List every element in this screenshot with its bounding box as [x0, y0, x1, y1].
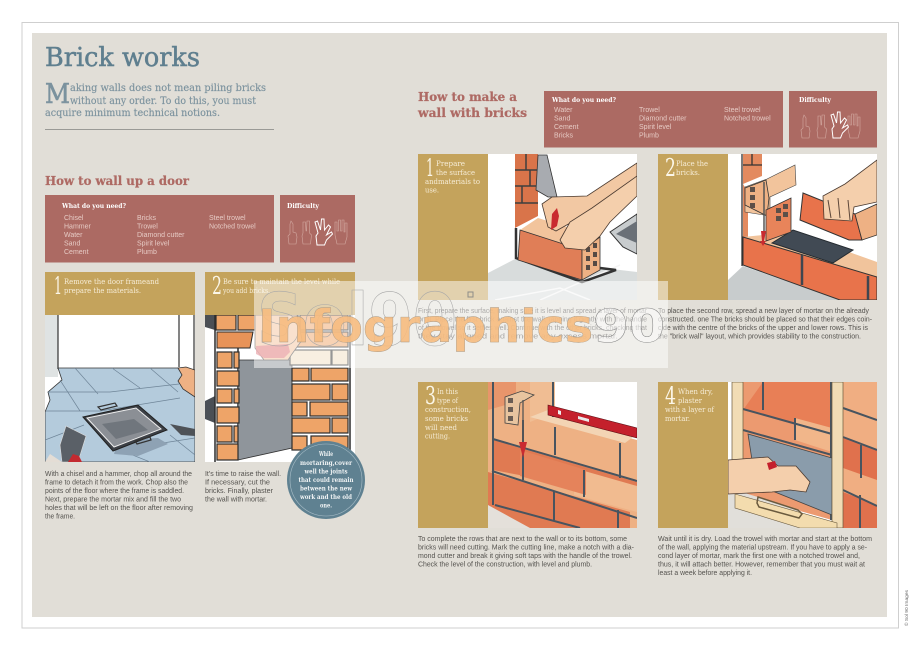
panel: what do you need (wall): What do you need? — [551, 96, 616, 104]
intro text: without any order. To do this, you must — [70, 95, 257, 107]
panel: what do you need (door): Water — [64, 232, 83, 239]
body text: step 1 (wall): on it. Place the first brick against the wall, tapping it gently with the handle — [418, 316, 647, 324]
body text: step 4 (wall): of the wall, applying the material upstream. If you have to apply a se- — [658, 544, 868, 552]
illustration: bricks and mortar in doorway — [205, 315, 355, 462]
step 2 header (wall): 2 — [665, 154, 676, 182]
step 2 header (door) — [205, 272, 355, 315]
body text: step 1 (door): frame to detach it from the work. Chop also the — [45, 480, 188, 486]
step 1 header (wall): Prepare — [436, 160, 465, 168]
panel: what do you need (door): Chisel — [64, 215, 84, 222]
panel: difficulty (door): Difficulty — [287, 202, 319, 210]
step 3 header (wall): 3 — [425, 382, 436, 410]
panel: what do you need (wall): Trowel — [639, 107, 660, 114]
body text: step 2 (wall): cide with the centre of the bricks of the upper and lower rows. This is — [658, 325, 868, 332]
step 3 header (wall): cutting. — [425, 432, 450, 440]
step 1 header (wall): the surface — [436, 169, 475, 177]
body text: step 3 (wall): Check the level of the construction, with level and plumb. — [418, 562, 592, 568]
heading: how to make a wall with bricks — [417, 89, 527, 120]
step 1 header (wall) — [418, 154, 488, 300]
callout: mortaring tip — [287, 441, 365, 519]
panel: difficulty (wall) — [789, 91, 877, 148]
body text: step 4 (wall): cond layer of mortar, mark the first one with a notched trowel and, — [658, 553, 860, 560]
step 2 header (wall): Place the — [676, 160, 708, 168]
intro text: M — [45, 79, 70, 110]
step 2 header (door): you add bricks. — [222, 287, 270, 295]
step 3 header (wall): some bricks — [425, 415, 468, 423]
step 1 header (door): Remove the door frameand — [64, 278, 160, 286]
heading: how to make a wall with bricks: wall with bricks — [417, 105, 527, 120]
body text: step 2 (door): If necessary, cut the — [205, 480, 270, 486]
step 1 header (wall): andmaterials to — [425, 178, 480, 186]
body text: step 4 (wall): Wait until it is dry. Load the trowel with mortar and start at the bottom — [658, 536, 872, 543]
step 1 header (door) — [45, 272, 195, 315]
illustration: placing first brick with trowel — [488, 154, 637, 300]
body text: step 3 (wall): mond cutter and break it giving soft taps with the handle of the trowel. — [418, 553, 632, 560]
step 4 header (wall): mortar. — [665, 415, 690, 423]
intro text: aking walls does not mean piling bricks — [70, 82, 266, 94]
body text: step 1 (wall): of the trowel so it settles well. Continue with the other bricks, checking that — [418, 325, 647, 332]
panel: what do you need (door): Plumb — [137, 249, 157, 256]
callout: mortaring tip: that could remain — [298, 477, 354, 484]
body text: step 2 (wall): To place the second row, spread a new layer of mortar on the already — [658, 308, 869, 315]
panel: what do you need (door): Trowel — [137, 224, 158, 230]
body text: step 1 (door): Next, prepare the mortar mix and fill the two — [45, 496, 181, 504]
illustration: cutting bricks with spirit level — [488, 382, 637, 528]
callout: mortaring tip: While — [318, 451, 333, 458]
illustration: tiled floor with mortar tray — [45, 315, 195, 462]
body text: step 2 (door): It's time to raise the wall. — [205, 471, 281, 478]
step 1 header (wall): use. — [425, 186, 439, 194]
callout: mortaring tip: work and the old — [299, 494, 353, 501]
callout: mortaring tip: mortaring,cover — [300, 460, 353, 467]
body text: step 1 (wall): they stay aligned and remove any excess mortar. — [418, 334, 618, 340]
body text: step 4 (wall): thus, it will attach better. However, remember that you must wait at — [658, 562, 865, 568]
illustration: laying second row of bricks — [728, 154, 877, 300]
panel: what do you need (wall): Notched trowel — [724, 116, 771, 122]
panel: what do you need (door): Sand — [64, 240, 80, 248]
body text: step 2 (door) — [205, 471, 281, 504]
panel: what do you need (door): Notched trowel — [209, 224, 256, 230]
body text: step 2 (wall) — [658, 308, 873, 340]
panel: what do you need (wall): Water — [554, 107, 573, 114]
step 3 header (wall): In this — [437, 388, 458, 396]
body text: step 3 (wall): To complete the rows that are next to the wall or to its bottom, some — [418, 536, 627, 543]
body text: step 1 (door): points of the floor where the frame is saddled. — [45, 488, 184, 495]
step 1 header (door): prepare the materials. — [64, 287, 141, 295]
heading: how to wall up a door: How to wall up a door — [45, 173, 189, 188]
panel: what do you need (wall): Bricks — [554, 132, 574, 140]
step 4 header (wall): 4 — [665, 382, 676, 410]
step 3 header (wall): will need — [425, 424, 458, 432]
step 2 header (wall): bricks. — [676, 169, 700, 177]
callout: mortaring tip: between the new — [300, 486, 353, 492]
body text: step 1 (wall): First, prepare the surface, making sure it is level and spread a layer of mortar — [418, 308, 648, 315]
heading: how to make a wall with bricks: How to make a — [418, 89, 517, 104]
watermark: Infographics — [258, 300, 593, 353]
panel: what do you need (wall) — [544, 91, 783, 148]
panel: what do you need (door): Spirit level — [137, 240, 170, 248]
body text: step 2 (door): the wall with mortar. — [205, 496, 267, 504]
body text: step 1 (door): the frame. — [45, 514, 75, 520]
title: Brick works — [45, 43, 200, 73]
step 2 header (door): Be sure to maintain the level while — [223, 278, 340, 286]
step 2 header (wall) — [658, 154, 728, 300]
panel: what do you need (door): Diamond cutter — [137, 232, 185, 239]
panel: what do you need (door): Cement — [64, 249, 89, 256]
panel: what do you need (door): Hammer — [64, 224, 92, 230]
panel: what do you need (wall): Sand — [554, 116, 570, 122]
step 1 header (door): 1 — [54, 272, 62, 300]
panel: difficulty (door) — [280, 195, 355, 262]
intro text: acquire minimum technical notions. — [45, 107, 220, 119]
body text: step 4 (wall) — [658, 536, 872, 577]
step 2 header (door): 2 — [212, 272, 222, 300]
credit: © Sol 90 Images — [903, 589, 909, 626]
body text: step 1 (door) — [45, 471, 193, 520]
callout: mortaring tip: one. — [320, 502, 332, 510]
panel: what do you need (door): Bricks — [137, 215, 157, 222]
panel: what do you need (wall): Plumb — [639, 132, 659, 140]
intro text — [45, 79, 266, 119]
step 4 header (wall) — [658, 382, 728, 528]
panel: what do you need (wall): Spirit level — [639, 124, 672, 131]
body text: step 1 (wall) — [418, 308, 648, 340]
body text: step 3 (wall): bricks will need cutting. Mark the cutting line, make a notch with a dia- — [418, 544, 635, 552]
panel: difficulty (wall): Difficulty — [799, 96, 831, 104]
panel: what do you need (wall): Steel trowel — [724, 107, 761, 114]
watermark: Sol90 — [257, 278, 457, 362]
body text: step 2 (wall): the "brick wall" layout, which provides stability to the construction. — [658, 334, 861, 340]
step 4 header (wall): with a layer of — [665, 406, 715, 414]
watermark — [254, 278, 668, 368]
step 4 header (wall): plaster — [678, 397, 703, 405]
step 3 header (wall) — [418, 382, 488, 528]
body text: step 3 (wall) — [418, 536, 635, 568]
step 4 header (wall): When dry, — [678, 388, 713, 396]
panel: what do you need (wall): Cement — [554, 124, 579, 131]
body text: step 2 (door): bricks. Finally, plaster — [205, 488, 274, 495]
panel: what do you need (door) — [45, 195, 274, 262]
step 3 header (wall): type of — [437, 397, 459, 405]
panel: what do you need (door): Steel trowel — [209, 215, 246, 222]
watermark: 90 — [593, 300, 665, 353]
body text: step 1 (door): With a chisel and a hammer, chop all around the — [45, 471, 192, 478]
callout: mortaring tip: well the joints — [304, 468, 348, 476]
panel: what do you need (wall): Diamond cutter — [639, 116, 687, 122]
step 3 header (wall): construction, — [425, 406, 471, 414]
step 1 header (wall): 1 — [426, 154, 434, 182]
panel: what do you need (door): What do you need? — [61, 202, 126, 210]
illustration: plastering wall with trowel — [728, 382, 877, 528]
body text: step 2 (wall): constructed. one The bricks should be placed so that their edges coin- — [658, 316, 873, 324]
body text: step 1 (door): holes that will be left on the floor after removing — [45, 505, 193, 512]
body text: step 4 (wall): least a week before applying it. — [658, 570, 752, 577]
